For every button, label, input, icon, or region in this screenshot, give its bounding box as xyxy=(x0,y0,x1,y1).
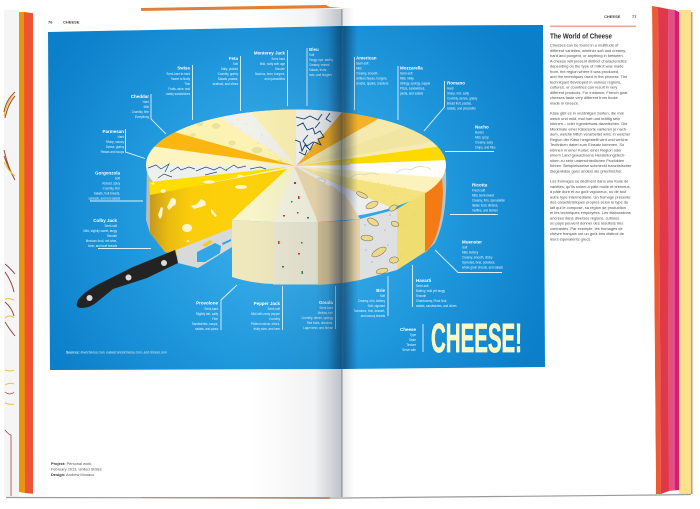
sponge dots xyxy=(370,180,410,196)
article text: English: A cheese will present distinct characteristics xyxy=(550,58,627,63)
label: Cheddar: Hard xyxy=(143,100,149,104)
article text: French: ou pays peuvent donner des résultats très xyxy=(550,220,623,226)
label: Romano: Romano xyxy=(447,80,465,86)
label: Swiss: Semi-hard to hard xyxy=(166,72,190,76)
legend: cheese key: Taste xyxy=(409,338,416,342)
article text: English: depending on the type of milk it was made xyxy=(550,64,624,68)
left page edge with cropped artwork xyxy=(4,10,19,497)
label: Romano: Hard xyxy=(447,86,454,91)
label: Muenster: whole grain breads, and salads xyxy=(462,265,503,270)
label: Brie: Soft xyxy=(380,294,385,298)
label: Brie: and savory breads xyxy=(361,314,385,318)
label: Romano xyxy=(424,80,477,131)
label: Swiss: Thin xyxy=(184,82,190,86)
label: Cheddar: Mild xyxy=(144,105,149,109)
article heading: The World of Cheese xyxy=(550,34,612,40)
label: Gorgonzola: Gorgonzola xyxy=(95,170,120,176)
colby jack slab xyxy=(149,167,288,256)
article text: German: Merkmale einer Käsesorte variieren je nach- xyxy=(550,126,628,131)
label: Swiss: roasty sandwiches xyxy=(166,92,190,96)
article text: French: leurs équivalents grecs. xyxy=(550,236,591,241)
article text: English: from, the region where it was produced, xyxy=(550,69,619,74)
label: Muenster: Creamy, smooth, sticky xyxy=(462,255,493,260)
label: Feta: Soft xyxy=(233,62,238,66)
blue infographic panel xyxy=(48,25,545,370)
label: Havarti: Chardonnay, Pinot Noir, xyxy=(416,299,447,303)
label: Monterey Jack xyxy=(254,50,288,106)
label: Muenster: Soft xyxy=(462,245,467,250)
label: American xyxy=(354,55,389,110)
text: CHEESE! xyxy=(431,315,522,361)
label: Swiss: Swiss xyxy=(177,65,190,71)
label: Nacho: Nacho xyxy=(475,124,489,130)
article text: German xyxy=(550,110,632,173)
legend: cheese key: Serve with xyxy=(402,348,416,352)
label: Feta: seafood, and olives xyxy=(213,82,238,86)
label: Monterey Jack: Semi-hard xyxy=(271,57,285,61)
label: Mozzarella: Mild, milky xyxy=(400,76,414,81)
left page edge colour stripes xyxy=(19,12,35,494)
right page header: CHEESE xyxy=(604,14,621,19)
cheese wedge xyxy=(232,166,360,285)
article text: German: Region der Käse hergestellt wird und welche xyxy=(550,137,629,142)
label: Havarti: Buttery, mild yet tangy xyxy=(416,289,445,293)
label: Monterey Jack: Mild, nutty with age xyxy=(260,62,285,66)
label: Feta xyxy=(213,56,240,111)
label: Ricotta: Mild, semi-sweet xyxy=(472,193,494,198)
label: Colby Jack: Mexican food, red wine, xyxy=(86,239,117,243)
label: Mozzarella xyxy=(398,65,430,120)
label: Nacho xyxy=(445,124,496,152)
legend: cheese key: Type xyxy=(410,333,416,337)
article text: English: hard and pungent, or anything in between. xyxy=(550,53,624,58)
label: Brie: Brie xyxy=(376,288,385,293)
label: Brie xyxy=(353,276,388,318)
label: Bleu: nuts, and burgers xyxy=(309,73,332,77)
right page edge colour stripes xyxy=(652,6,692,494)
article text: English: different varieties, whether soft and creamy, xyxy=(550,48,626,53)
article text: French: contrastés. Par exemple, les fromages de xyxy=(550,226,623,231)
label: American: Semi-soft xyxy=(356,61,369,66)
label: Ricotta: Creamy, firm, spreadable xyxy=(472,198,505,203)
label: Monterey Jack: Monterey Jack xyxy=(254,50,285,56)
right page header xyxy=(604,14,637,19)
brie outlines in white slice xyxy=(350,166,431,178)
bottom page shadow xyxy=(6,494,691,498)
wheel top slices xyxy=(146,110,446,220)
label: Romano: Sharp, rich, salty xyxy=(447,91,469,96)
label: Ricotta: Ricotta xyxy=(472,182,488,188)
label: Ricotta: Fresh soft xyxy=(472,188,485,193)
label: Pepper Jack: Semi-soft xyxy=(268,307,280,311)
label: Havarti: salads, sandwiches, and olives xyxy=(416,304,457,308)
article text: German: weich und mild, mal hart und kräftig sein xyxy=(550,116,620,121)
label: Mozzarella: Stringy, springy, supple xyxy=(400,81,430,86)
article text: English: made in Greece. xyxy=(550,100,579,105)
article text: German: führen. Beispielsweise schmeckt französischer xyxy=(550,163,632,168)
label: Romano: Bread fruit, pastas, xyxy=(447,101,472,106)
label: Brie: Soft, vigorant xyxy=(368,304,385,308)
label: Ricotta: Italian food, lifetsna, xyxy=(472,203,498,208)
article text: French: ancrées dans diverses régions, cultures xyxy=(550,215,619,220)
right page header: 77 xyxy=(632,14,637,19)
label: Bleu: Soft xyxy=(309,53,314,57)
article text: French: des caractéristiques propres selon le type de xyxy=(550,200,629,204)
label: Muenster xyxy=(435,239,503,272)
label: Parmesan: Pastas and soups xyxy=(101,150,124,154)
article text: French: lait qui le compose, sa région de production xyxy=(550,205,626,210)
label: Provolone xyxy=(192,285,237,331)
blue vein marbling top xyxy=(295,113,331,155)
label: Parmesan: Parmesan xyxy=(103,129,124,134)
article text: English: Cheeses can be found in a multitude of xyxy=(550,42,619,48)
speckled feta dots xyxy=(231,119,271,151)
label: Colby Jack: beer, and beef breads xyxy=(88,244,117,248)
slice highlights: hub rays xyxy=(296,160,350,166)
article text: French: Les fromages se déclinent dans une foule de xyxy=(550,178,629,184)
label: Muenster: Sprouted, beer, potatoes, xyxy=(462,260,495,265)
sources: Sources: ilovecheese.com, eatwisconsincheese.com, and cheese.com xyxy=(66,350,167,354)
label: Gouda: Crumbly, dense, springy xyxy=(301,316,333,320)
article text: German: können – oder irgendetwas dazwischen. Die xyxy=(550,121,628,126)
swiss cheese holes xyxy=(190,122,282,162)
label: American: Grilled cheese, burgers, xyxy=(356,76,387,81)
top and bottom cover edge xyxy=(141,5,342,499)
label: Havarti: Smooth xyxy=(416,294,426,298)
label: Gorgonzola: Soft xyxy=(115,176,120,181)
book gutter shading xyxy=(250,8,358,497)
label: Cheddar xyxy=(131,94,166,134)
article text: German: Techniken dabei zum Einsatz kommen. So xyxy=(550,142,625,147)
label: Nacho: Chips, and fries xyxy=(475,145,496,150)
label: Ricotta: muffins, and berries xyxy=(472,208,498,213)
article rule xyxy=(550,26,636,27)
label: Pepper Jack xyxy=(251,286,282,331)
article text: English: and the techniques used in the process. The xyxy=(550,74,628,79)
label: Monterey Jack: Smooth xyxy=(275,67,285,71)
label: Pepper Jack: Mild with zesty pepper xyxy=(251,312,281,316)
label: Gouda xyxy=(301,286,336,330)
label: Ricotta xyxy=(450,182,505,214)
article text: German: einem Land gewachsene Herstellungstech- xyxy=(550,152,626,158)
label: Provolone: Sandwiches, soups, xyxy=(192,322,218,326)
label: Provolone: Provolone xyxy=(196,300,218,306)
label: Parmesan: Sharp, savory xyxy=(106,140,124,144)
label: Colby Jack xyxy=(84,218,151,248)
label: Pepper Jack: Crumbly xyxy=(269,317,280,321)
label: Monterey Jack: and quesadillas xyxy=(265,77,285,81)
label: Feta: Salads, pastas, xyxy=(218,77,238,81)
project credit: February 2013, United States xyxy=(51,466,102,472)
label: Gouda: Red fruits, almonds, xyxy=(307,321,333,325)
article text: French: et les techniques employées. Les élaborations xyxy=(550,210,631,215)
label: Provolone: Semi-hard xyxy=(204,307,218,311)
label: Bleu: Bleu xyxy=(309,47,319,52)
knife handle xyxy=(77,250,178,308)
label: Mozzarella: pasta, and salads xyxy=(400,91,423,96)
label: Pepper Jack: Pickled onions, olives, xyxy=(251,322,280,326)
label: Nacho: Border xyxy=(475,130,485,135)
article text: English: different products. For instance, French goat xyxy=(550,90,628,95)
left page xyxy=(33,8,342,497)
label: Feta: Crumbly, grainy xyxy=(218,72,238,76)
label: Gorgonzola: Robust, spicy xyxy=(102,181,120,186)
label: Havarti: Havarti xyxy=(416,278,431,283)
label: American: Creamy, smooth xyxy=(356,71,378,76)
article text: French: autre type intermédiaire. Un fromage présente xyxy=(550,194,631,199)
gorgonzola marbling xyxy=(148,164,266,178)
label: American: American xyxy=(356,55,377,61)
label: Feta: Salty, pickled xyxy=(221,67,238,71)
label: Swiss: Sweet to Nutty xyxy=(171,77,190,81)
legend: cheese key xyxy=(400,324,423,352)
legend: cheese key: Cheese xyxy=(400,327,416,332)
label: Colby Jack: Semi-soft xyxy=(105,224,117,228)
label: Nacho: Mild, spicy xyxy=(475,135,489,140)
right page xyxy=(342,6,656,497)
knife xyxy=(77,228,232,308)
left page header: 76 xyxy=(48,20,53,24)
label: Colby Jack: Mild, slightly sweet, tangy xyxy=(84,229,117,233)
label: Cheddar: Everything xyxy=(135,115,149,119)
label: Nacho: Creamy, easy xyxy=(475,140,493,145)
label: Gorgonzola: Crumbly, firm xyxy=(103,186,120,191)
knife blade xyxy=(176,228,232,268)
label: Pepper Jack: fruity wine, and beer xyxy=(254,327,281,331)
label: Monterey Jack: Nachos, beer, burgers, xyxy=(255,72,285,76)
article text: English: techniques developed in various regions, xyxy=(550,79,621,84)
article text: French: à pâte dure et au goût vigoureux, ou de tout xyxy=(550,189,627,194)
article text: German: Käse gibt es in unzähligen Sorten, die mal xyxy=(550,110,624,116)
label: Colby Jack: Colby Jack xyxy=(93,218,117,223)
label: Brie: Creamy, rich, buttery xyxy=(358,299,385,303)
label: Provolone: salads, and pizza xyxy=(195,327,218,331)
label: Gouda: Mellow, rich xyxy=(318,311,333,315)
left page header: CHEESE xyxy=(63,20,80,24)
article text: English xyxy=(550,42,628,105)
label: Mozzarella: Semi-soft xyxy=(400,71,413,76)
label: Romano: Crumbly, dense, grainy xyxy=(447,96,477,101)
sponge face dots xyxy=(402,214,418,256)
label: American: snacks, apples, crackers xyxy=(356,81,389,86)
label: Muenster: Mild, buttery xyxy=(462,250,478,255)
article text: French: chèvre français ont un goût très distinct de xyxy=(550,231,625,236)
article text: German: dem, welche Milch verarbeitet wird, in welcher xyxy=(550,132,631,136)
cheese wheel xyxy=(146,110,446,280)
article text: German: Ziegenkäse ganz anders als griechischer. xyxy=(550,168,622,173)
article text: English: cultures, or countries can result in very xyxy=(550,84,617,90)
label: Gorgonzola: spreads, and red salads xyxy=(89,196,120,201)
label: Cheddar: Cheddar xyxy=(131,94,149,99)
label: Colby Jack: Smooth xyxy=(107,234,117,238)
label: Mozzarella: Pizza, sandwiches, xyxy=(400,86,425,91)
label: Parmesan: Dense, grainy xyxy=(106,145,124,149)
wheel side wall xyxy=(146,165,446,280)
label: Muenster: Muenster xyxy=(462,239,482,245)
label: Havarti: Semi-soft xyxy=(416,284,429,288)
article text: German: können in einer Kultur, einer Region oder xyxy=(550,147,622,152)
label: Pepper Jack: Pepper Jack xyxy=(254,301,280,306)
label: Parmesan xyxy=(101,129,145,158)
label: Gorgonzola: Salads, fruit breads, xyxy=(94,191,120,196)
spotted white face ovals xyxy=(356,190,400,275)
label: Havarti xyxy=(412,265,457,308)
left page header xyxy=(48,20,80,24)
project credit: Project: Personal work, xyxy=(51,461,92,466)
label: Swiss: Fruits, wine, and xyxy=(168,87,190,91)
label: Gorgonzola xyxy=(89,170,143,201)
label: Swiss xyxy=(166,65,192,120)
label: American: Mild xyxy=(356,66,362,71)
label: Bleu: Salads, fruits, xyxy=(309,68,327,72)
label: Mozzarella: Mozzarella xyxy=(400,65,423,71)
label: Provolone: Slightly tart, salty xyxy=(196,312,218,316)
project credit xyxy=(51,461,102,477)
label: Gouda: Lager beer, and Merlot xyxy=(303,326,333,330)
label: Bleu: Creamy, veined xyxy=(309,63,330,67)
label: Gouda: Semi-hard xyxy=(319,306,333,310)
white blotches xyxy=(151,175,247,242)
label: Brie: Tomatoes, fruit, dessert, xyxy=(353,309,385,313)
wedge herb flecks xyxy=(278,182,300,254)
label: Bleu xyxy=(307,47,333,106)
grey face specks xyxy=(364,212,390,262)
label: Feta: Feta xyxy=(229,56,238,61)
label: Gouda: Gouda xyxy=(319,300,333,305)
project credit: Design: Andrew Monaco xyxy=(51,472,94,477)
label: Provolone: Firm xyxy=(212,317,218,321)
article text: French xyxy=(550,178,631,241)
knife rivets xyxy=(86,260,167,301)
label: Romano: salads, and prosciutto xyxy=(447,106,476,111)
article text: French: variétés, qu'ils soient à pâte molle et crémeux, xyxy=(550,184,631,189)
label: Cheddar: Crumbly, firm xyxy=(132,110,149,114)
article text: English: cheeses taste very different from those xyxy=(550,95,619,100)
label: Bleu: Tangy, ripe, earthy xyxy=(309,58,333,62)
legend: cheese key: Texture xyxy=(406,343,416,347)
article text: German: niken zu sehr unterschiedlichen Produkten xyxy=(550,158,624,163)
label: Parmesan: Hard xyxy=(118,135,124,139)
